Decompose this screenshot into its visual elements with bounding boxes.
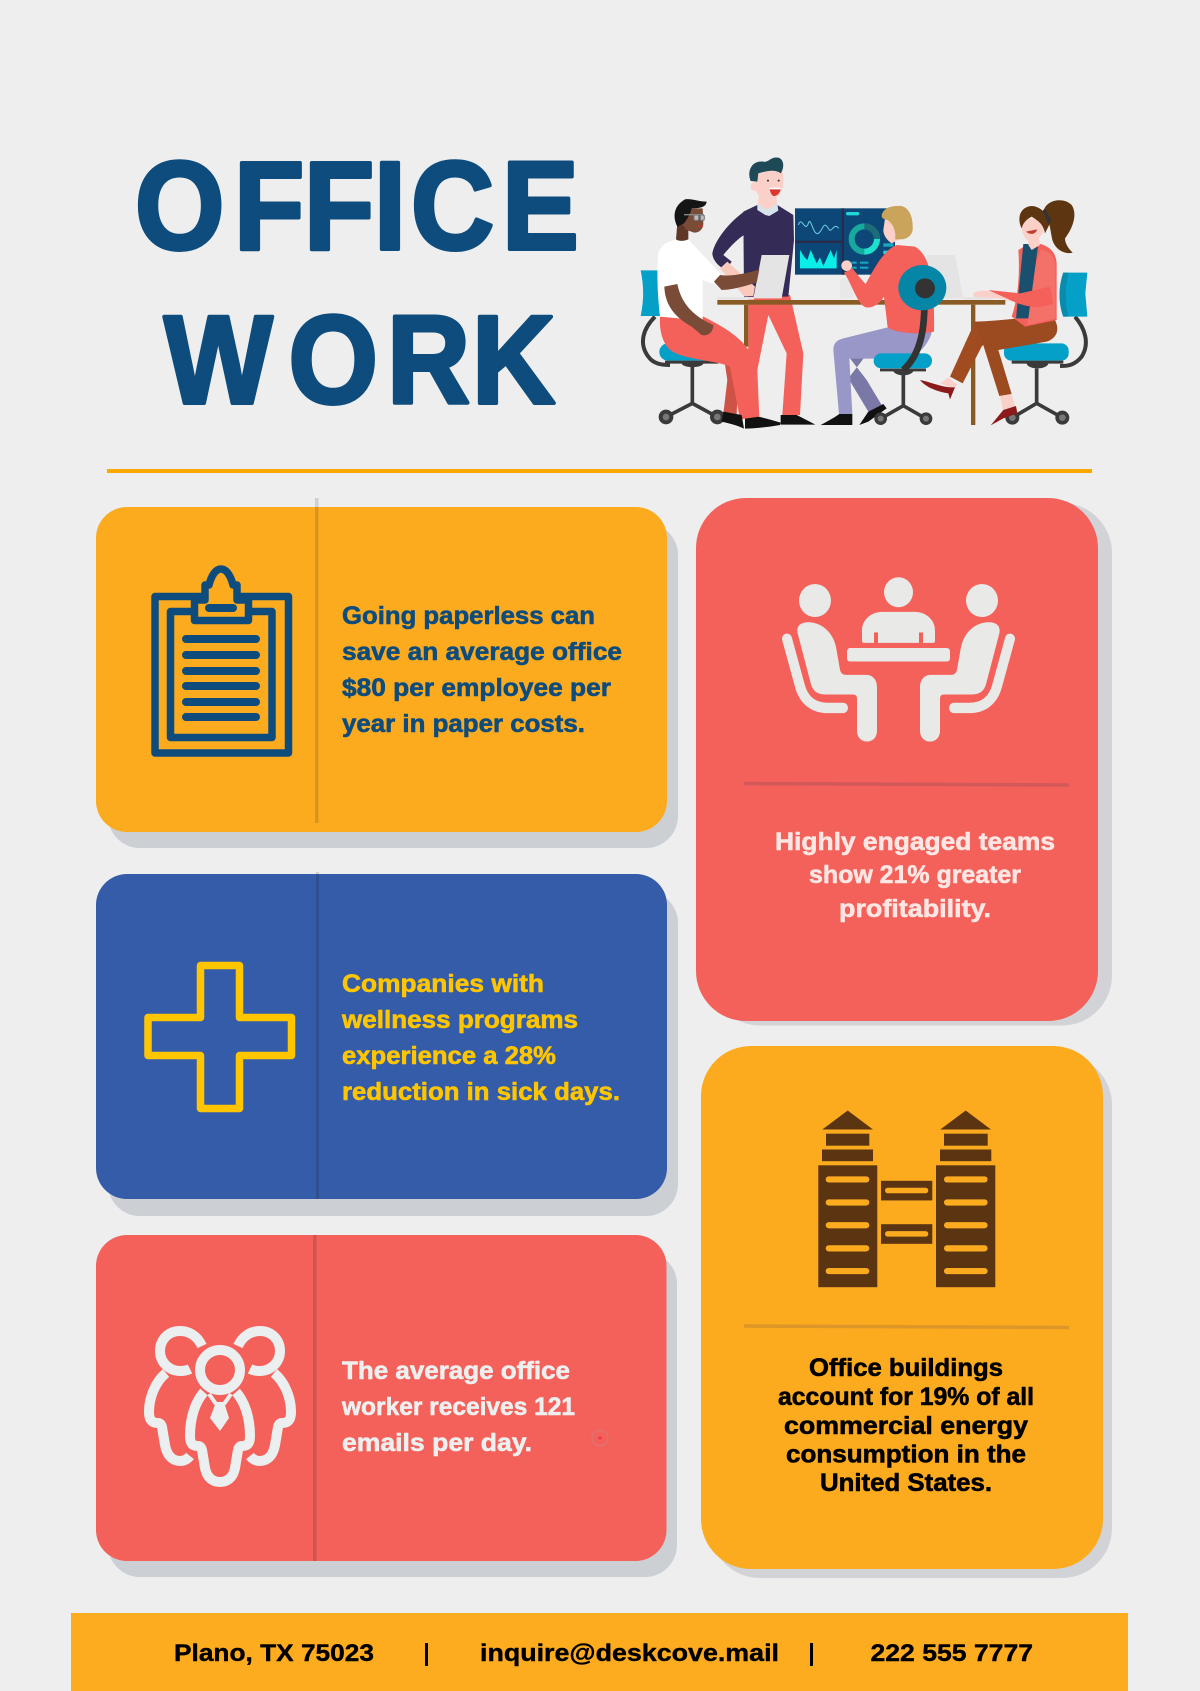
footer: address: Plano, TX 75023 (174, 1640, 374, 1667)
text: wellness fact: Companies with (342, 970, 544, 998)
text: engagement fact: Highly engaged teams (775, 828, 1055, 856)
text: email fact: emails per day. (342, 1429, 532, 1457)
text: energy fact: United States. (820, 1469, 992, 1497)
text: wellness fact: reduction in sick days. (342, 1078, 620, 1106)
text: paperless fact: year in paper costs. (342, 710, 585, 738)
text: engagement fact: profitability. (839, 895, 991, 923)
title: OFFICE (135, 137, 579, 276)
text: email fact (341, 1357, 575, 1457)
text: paperless fact: Going paperless can (342, 602, 595, 630)
title: WORK (164, 291, 555, 430)
text: energy fact: Office buildings (809, 1354, 1003, 1382)
title (135, 137, 579, 430)
text: paperless fact: save an average office (342, 638, 622, 666)
panel: emails (96, 1235, 677, 1577)
icon: small marker dot (592, 1430, 608, 1446)
left seated man (657, 199, 759, 429)
laptops (717, 255, 993, 300)
footer bar (71, 1613, 1128, 1691)
text: energy fact: account for 19% of all (778, 1383, 1034, 1411)
text: energy fact: commercial energy (784, 1412, 1028, 1440)
standing man (712, 158, 815, 429)
icon: meeting table (787, 577, 1010, 742)
text: energy fact: consumption in the (786, 1440, 1026, 1468)
back-view man on chair (821, 206, 946, 425)
text: paperless fact (342, 602, 622, 738)
text: engagement fact: show 21% greater (809, 861, 1021, 889)
icon: medical cross (148, 966, 292, 1108)
text: email fact: The average office (342, 1357, 570, 1385)
panel: paperless (96, 498, 678, 848)
desk (717, 300, 1005, 425)
text: paperless fact: $80 per employee per (342, 674, 611, 702)
right seated woman (920, 200, 1087, 425)
text: energy fact (778, 1354, 1034, 1497)
panel: wellness (96, 872, 678, 1216)
text: wellness fact: experience a 28% (342, 1042, 556, 1070)
text: wellness fact: wellness programs (341, 1006, 578, 1034)
text: wellness fact (341, 970, 620, 1106)
panel: engaged teams (696, 498, 1112, 1026)
footer: phone: 222 555 7777 (870, 1640, 1033, 1667)
icon: clipboard (155, 569, 288, 753)
icon: twin towers (818, 1111, 995, 1287)
footer: separator (810, 1643, 813, 1666)
footer: email: inquire@deskcove.mail (480, 1640, 779, 1667)
icon: group of people with tie (149, 1331, 291, 1482)
left chair (641, 270, 725, 424)
footer: separator (425, 1643, 428, 1666)
panel: office buildings (701, 1046, 1112, 1578)
illustration: team meeting at office desk (641, 158, 1087, 429)
text: email fact: worker receives 121 (341, 1393, 575, 1421)
header divider line (107, 469, 1092, 473)
desk monitors (795, 208, 895, 275)
text: engagement fact (775, 828, 1055, 923)
